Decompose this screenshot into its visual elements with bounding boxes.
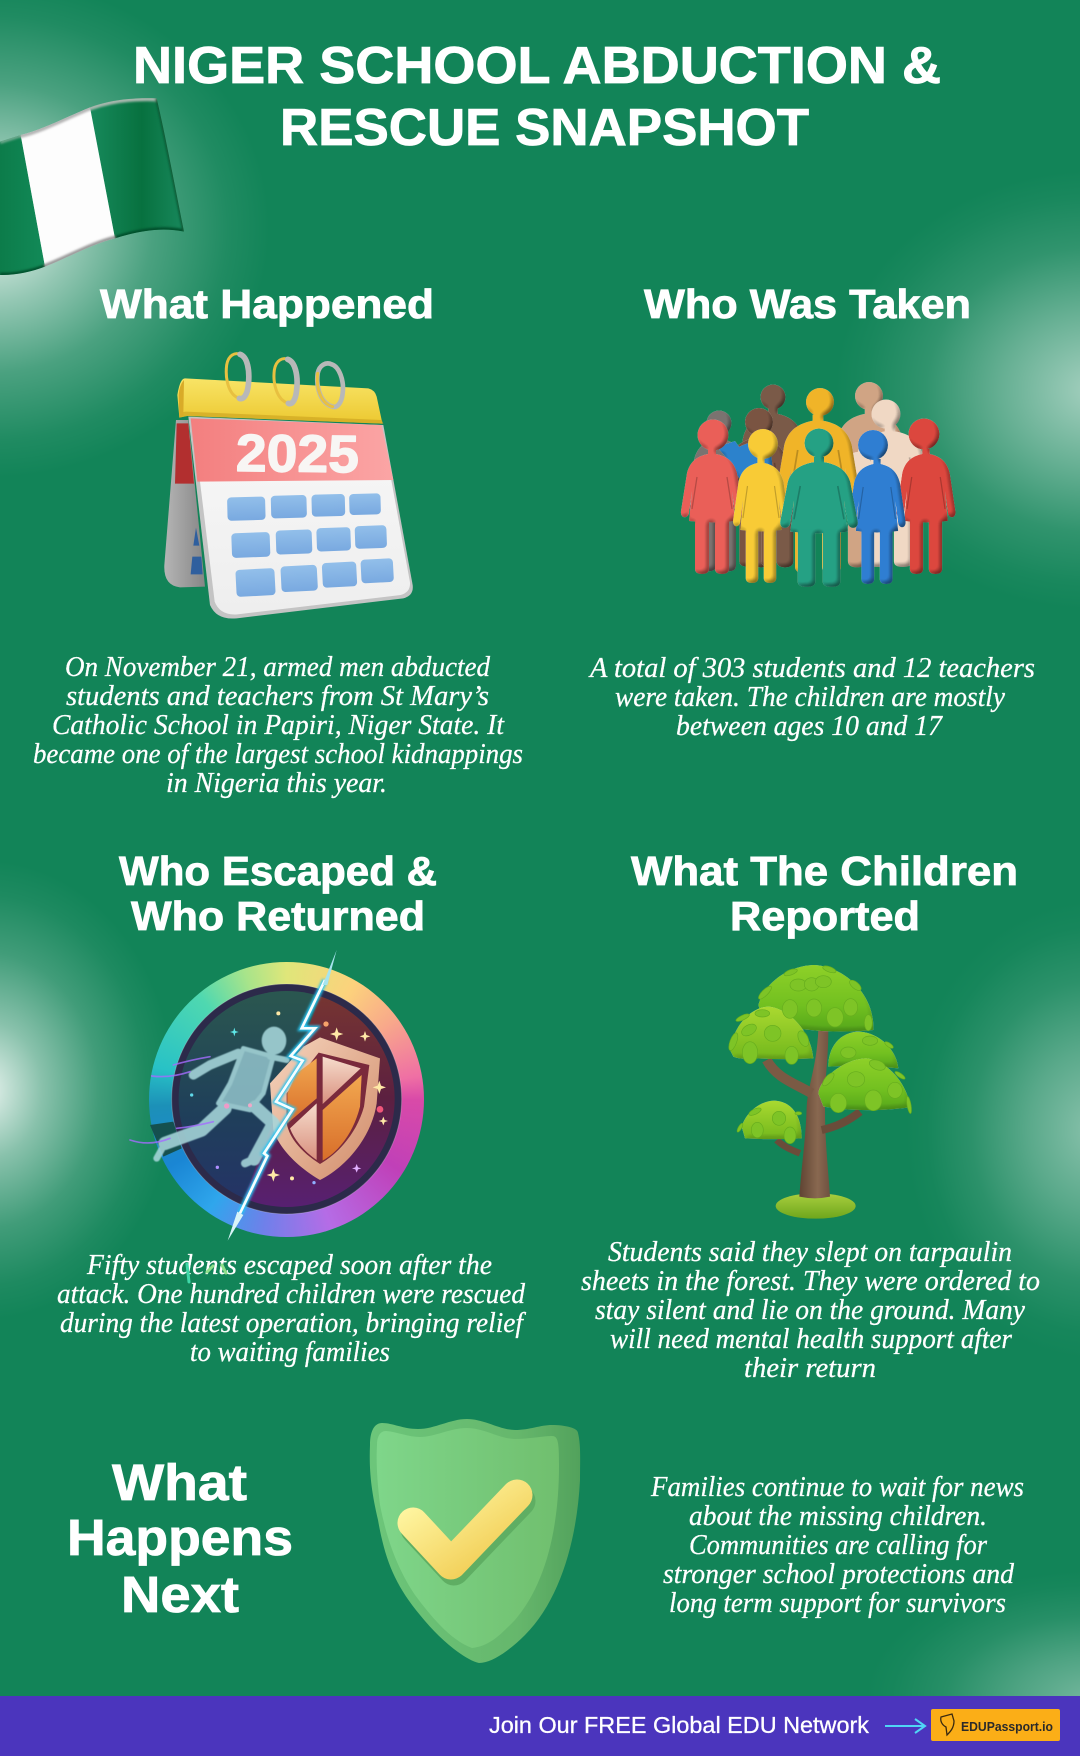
icon: runner, lightning and shield in rainbow ring bbox=[130, 950, 424, 1241]
date grid bbox=[227, 493, 394, 597]
icon: Nigerian flag bbox=[0, 98, 184, 275]
runner figure bbox=[157, 1027, 287, 1163]
heading: Who Escaped & Who Returned: Who Returned bbox=[131, 893, 425, 939]
heading: What Happens Next bbox=[67, 1454, 293, 1623]
heading: What Happens Next: What bbox=[112, 1454, 247, 1511]
icon: green shield with check bbox=[370, 1419, 580, 1663]
sparkles bbox=[190, 1011, 388, 1184]
button: EDUPassport.io: EDUPassport.io bbox=[961, 1719, 1053, 1734]
text: what happens next: about the missing children. bbox=[689, 1501, 987, 1532]
heading: What Happens Next: Happens bbox=[67, 1509, 293, 1566]
footer text: Join Our FREE Global EDU Network bbox=[489, 1712, 869, 1738]
heading: What Happened: What Happened bbox=[100, 281, 434, 327]
icon: tree bbox=[727, 964, 912, 1219]
icon: calendar 2025 bbox=[164, 354, 413, 619]
leaves bbox=[727, 964, 912, 1144]
text: what happens next: Communities are calling for bbox=[689, 1530, 987, 1561]
text: what the children reported: stay silent and lie on the ground. Many bbox=[595, 1295, 1026, 1326]
text: who was taken bbox=[588, 653, 1035, 742]
text: what happened: students and teachers from St Mary’s bbox=[66, 681, 489, 712]
icon: group of people bbox=[681, 382, 956, 587]
text: what happened: in Nigeria this year. bbox=[166, 768, 387, 799]
title: NIGER SCHOOL ABDUCTION & bbox=[133, 37, 941, 95]
title: RESCUE SNAPSHOT bbox=[280, 99, 809, 157]
lightning bolt bbox=[240, 980, 325, 1213]
heading: What The Children Reported bbox=[631, 848, 1018, 939]
heading: What The Children Reported: Reported bbox=[730, 893, 920, 939]
button: EDUPassport.io bbox=[931, 1709, 1060, 1741]
arrow bbox=[885, 1719, 925, 1733]
heading: What The Children Reported: What The Children bbox=[631, 848, 1018, 894]
text: who escaped: to waiting families bbox=[190, 1337, 390, 1368]
text: what happened: became one of the largest school kidnappings bbox=[33, 739, 523, 770]
text: what happens next bbox=[650, 1472, 1024, 1619]
text: what happened: Catholic School in Papiri, Niger State. It bbox=[52, 710, 505, 741]
heading: Who Escaped & Who Returned bbox=[119, 848, 437, 939]
text: what the children reported: their return bbox=[744, 1353, 876, 1384]
text: what happened: On November 21, armed men abducted bbox=[65, 652, 491, 683]
heading: Who Escaped & Who Returned: Who Escaped & bbox=[119, 848, 437, 894]
text: who escaped: Fifty students escaped soon after the bbox=[86, 1250, 492, 1281]
text: what happened bbox=[33, 652, 523, 799]
calendar year: 2025 bbox=[236, 424, 359, 484]
text: who escaped: during the latest operation, bringing relief bbox=[60, 1308, 526, 1339]
shield emblem bbox=[270, 1037, 380, 1180]
text: who was taken: were taken. The children are mostly bbox=[615, 682, 1006, 713]
binder rings bbox=[226, 354, 343, 407]
text: what the children reported: will need mental health support after bbox=[610, 1324, 1012, 1355]
text: who escaped: attack. One hundred children were rescued bbox=[57, 1279, 526, 1310]
crowns bbox=[828, 1032, 898, 1068]
text: who was taken: A total of 303 students and 12 teachers bbox=[588, 653, 1035, 684]
text: who escaped bbox=[57, 1250, 526, 1368]
text: what the children reported: Students said they slept on tarpaulin bbox=[608, 1237, 1012, 1268]
text: what happens next: long term support for survivors bbox=[669, 1588, 1006, 1619]
footer bar bbox=[0, 1696, 1080, 1756]
title bbox=[133, 37, 941, 157]
text: what the children reported: sheets in the forest. They were ordered to bbox=[581, 1266, 1040, 1297]
heading: Who Was Taken: Who Was Taken bbox=[644, 281, 971, 327]
text: what happens next: stronger school protections and bbox=[663, 1559, 1015, 1590]
stray colour flecks over text bbox=[187, 1264, 226, 1282]
text: what happens next: Families continue to wait for news bbox=[650, 1472, 1024, 1503]
text: what the children reported bbox=[581, 1237, 1040, 1384]
heading: What Happens Next: Next bbox=[121, 1566, 239, 1623]
text: who was taken: between ages 10 and 17 bbox=[676, 711, 943, 742]
